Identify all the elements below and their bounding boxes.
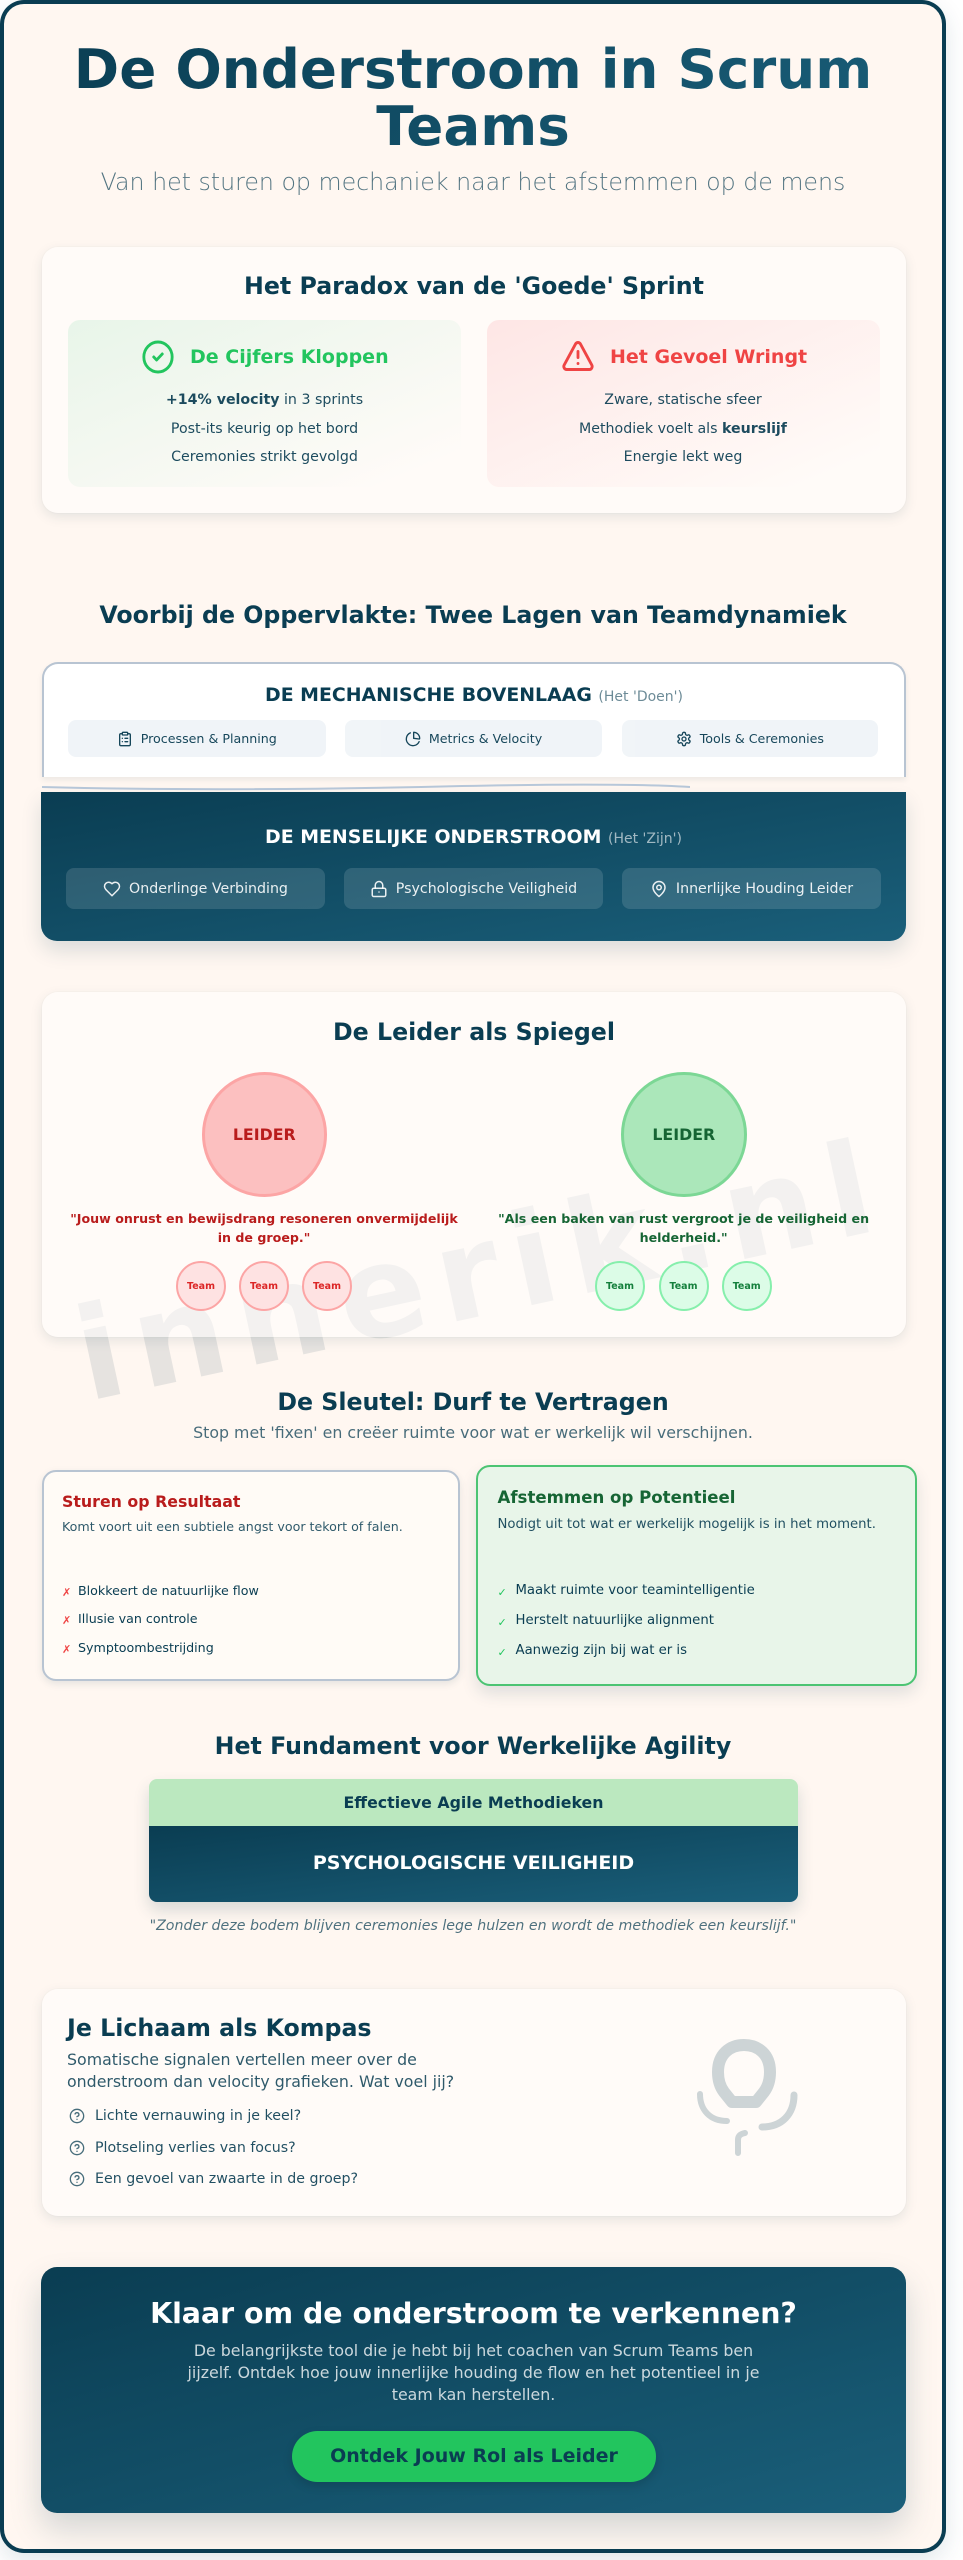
team circle: Team xyxy=(313,1280,341,1292)
panel: mechanische bovenlaag xyxy=(42,662,906,777)
chip: metrics: Metrics & Velocity xyxy=(429,731,542,746)
panel: het gevoel wringt xyxy=(486,320,880,487)
circle: leider onrust xyxy=(202,1072,327,1197)
list: voordelen: Maakt ruimte voor teamintelligentie xyxy=(516,1583,755,1598)
text: keurslijf: Methodiek voelt als keurslijf xyxy=(579,421,787,437)
team circle: Team xyxy=(606,1280,634,1292)
panel: paradox van de goede sprint xyxy=(42,247,906,513)
wave line between layers xyxy=(42,784,690,790)
heading: afstemmen op potentieel: Afstemmen op Potentieel xyxy=(498,1488,735,1507)
team circle: Team xyxy=(187,1280,215,1292)
panel: je lichaam als kompas xyxy=(42,1989,906,2216)
list: nadelen: Illusie van controle xyxy=(78,1611,198,1626)
title xyxy=(0,41,946,156)
quote: rust: helderheid." xyxy=(640,1230,728,1245)
list: voordelen: ✓ xyxy=(498,1616,507,1629)
circle: leider rust xyxy=(621,1072,746,1197)
heading: het gevoel wringt: Het Gevoel Wringt xyxy=(610,346,807,368)
list: voordelen: ✓ xyxy=(498,1586,507,1599)
team circle: Team xyxy=(250,1280,278,1292)
chip: processen xyxy=(68,720,326,757)
icon: warning triangle xyxy=(562,341,594,371)
text: somatische signalen: Somatische signalen vertellen meer over de xyxy=(67,2050,417,2069)
team circle xyxy=(239,1261,289,1311)
diagram: fundament stack xyxy=(149,1779,798,1902)
text: uitnodiging: jijzelf. Ontdek hoe jouw innerlijke houding de flow en het potentieel in je xyxy=(188,2363,759,2382)
list: voordelen: Aanwezig zijn bij wat er is xyxy=(516,1643,687,1658)
list: nadelen: ✗ xyxy=(62,1643,71,1656)
chip: verbinding xyxy=(66,868,325,909)
text: energie: Energie lekt weg xyxy=(624,449,742,465)
item: focus: Plotseling verlies van focus? xyxy=(95,2140,296,2156)
heading: leider als spiegel: De Leider als Spiegel xyxy=(333,1018,615,1046)
text: uitnodiging: De belangrijkste tool die je hebt bij het coachen van Scrum Teams ben xyxy=(194,2341,753,2360)
item: keel: Lichte vernauwing in je keel? xyxy=(95,2108,301,2124)
team circle xyxy=(595,1261,645,1311)
item: zwaarte: Een gevoel van zwaarte in de groep? xyxy=(95,2171,358,2187)
chip: processen: Processen & Planning xyxy=(141,731,277,746)
quote: onrust xyxy=(70,1211,458,1245)
icon: check circle xyxy=(142,340,174,374)
subtitle: Van het sturen op mechaniek naar het afstemmen op de mens xyxy=(101,168,845,196)
chip: metrics xyxy=(345,720,602,757)
panel: call to action xyxy=(41,2267,906,2513)
text: angst: Komt voort uit een subtiele angst voor tekort of falen. xyxy=(62,1519,403,1534)
text: velocity: +14% velocity in 3 sprints xyxy=(166,392,363,408)
panel: sturen op resultaat xyxy=(42,1470,460,1681)
text: somatische signalen: onderstroom dan velocity grafieken. Wat voel jij? xyxy=(67,2072,454,2091)
text: ceremonies: Ceremonies strikt gevolgd xyxy=(171,449,358,465)
heading: klaar om te verkennen: Klaar om de onderstroom te verkennen? xyxy=(150,2297,797,2330)
chip: veiligheid xyxy=(344,868,603,909)
team circle xyxy=(176,1261,226,1311)
heading: sturen op resultaat: Sturen op Resultaat xyxy=(62,1492,240,1511)
panel: de cijfers kloppen xyxy=(68,320,461,487)
list: nadelen: ✗ xyxy=(62,1614,71,1627)
heading: fundament: Het Fundament voor Werkelijke Agility xyxy=(215,1732,731,1760)
layer: psychologische veiligheid xyxy=(149,1826,798,1902)
chip: veiligheid: Psychologische Veiligheid xyxy=(396,880,577,896)
heading: je lichaam als kompas: Je Lichaam als Kompas xyxy=(67,2014,372,2042)
text: uitnodiging: team kan herstellen. xyxy=(392,2385,555,2404)
circle: leider onrust: LEIDER xyxy=(233,1125,296,1144)
panel: afstemmen op potentieel xyxy=(476,1465,917,1686)
text: uitnodiging xyxy=(187,2341,759,2404)
team circle xyxy=(658,1261,708,1311)
subheading: de sleutel: Stop met 'fixen' en creëer ruimte voor wat er werkelijk wil verschijnen. xyxy=(193,1423,753,1442)
quote: onrust: "Jouw onrust en bewijsdrang resoneren onvermijdelijk xyxy=(70,1211,458,1226)
title: Teams xyxy=(376,94,570,158)
layer: agile methodieken xyxy=(149,1779,798,1826)
team circle xyxy=(302,1261,352,1311)
panel: de leider als spiegel xyxy=(42,992,906,1337)
text: nodigt uit: Nodigt uit tot wat er werkelijk mogelijk is in het moment. xyxy=(498,1517,876,1532)
quote: bodem: "Zonder deze bodem blijven ceremonies lege hulzen en wordt de methodiek een keurslijf." xyxy=(150,1918,796,1934)
team circle: Team xyxy=(670,1280,697,1292)
list: nadelen xyxy=(62,1583,259,1656)
text: post-its: Post-its keurig op het bord xyxy=(171,421,358,437)
heading: paradox: Het Paradox van de 'Goede' Sprint xyxy=(244,272,704,300)
quote: onrust: in de groep." xyxy=(218,1230,310,1245)
chip: tools xyxy=(622,720,878,757)
chip: verbinding: Onderlinge Verbinding xyxy=(129,880,288,896)
panel: menselijke onderstroom xyxy=(41,792,906,941)
heading: menselijke onderstroom: DE MENSELIJKE ONDERSTROOM (Het 'Zijn') xyxy=(265,826,682,848)
quote: rust: "Als een baken van rust vergroot je de veiligheid en xyxy=(498,1211,869,1226)
list: nadelen: Blokkeert de natuurlijke flow xyxy=(78,1583,259,1598)
text: somatische signalen xyxy=(67,2050,454,2091)
circle: leider rust: LEIDER xyxy=(652,1125,715,1144)
layer: agile methodieken: Effectieve Agile Methodieken xyxy=(344,1793,604,1812)
chip: houding: Innerlijke Houding Leider xyxy=(676,880,853,896)
list: nadelen: Symptoombestrijding xyxy=(78,1640,214,1655)
icon: body figure xyxy=(697,2039,798,2156)
text: sfeer: Zware, statische sfeer xyxy=(604,392,762,408)
title: De Onderstroom in Scrum xyxy=(74,37,872,101)
heading: mechanische bovenlaag: DE MECHANISCHE BOVENLAAG (Het 'Doen') xyxy=(265,684,683,706)
list: voordelen: Herstelt natuurlijke alignment xyxy=(516,1613,714,1628)
layer: psychologische veiligheid: PSYCHOLOGISCHE VEILIGHEID xyxy=(313,1852,634,1874)
team circle xyxy=(722,1261,772,1311)
button: ontdek jouw rol: Ontdek Jouw Rol als Leider xyxy=(330,2445,618,2467)
watermark: innerik.nl xyxy=(63,1112,899,1431)
heading: de sleutel: De Sleutel: Durf te Vertragen xyxy=(277,1388,669,1416)
list: voordelen xyxy=(498,1583,755,1659)
chip: tools: Tools & Ceremonies xyxy=(700,731,824,746)
team circle: Team xyxy=(733,1280,761,1292)
quote: rust xyxy=(498,1211,869,1245)
button: ontdek jouw rol xyxy=(292,2431,656,2482)
heading: twee lagen: Voorbij de Oppervlakte: Twee Lagen van Teamdynamiek xyxy=(99,601,847,629)
list: voordelen: ✓ xyxy=(498,1646,507,1659)
heading: de cijfers kloppen: De Cijfers Kloppen xyxy=(190,346,389,368)
chip: houding xyxy=(622,868,881,909)
list: nadelen: ✗ xyxy=(62,1586,71,1599)
